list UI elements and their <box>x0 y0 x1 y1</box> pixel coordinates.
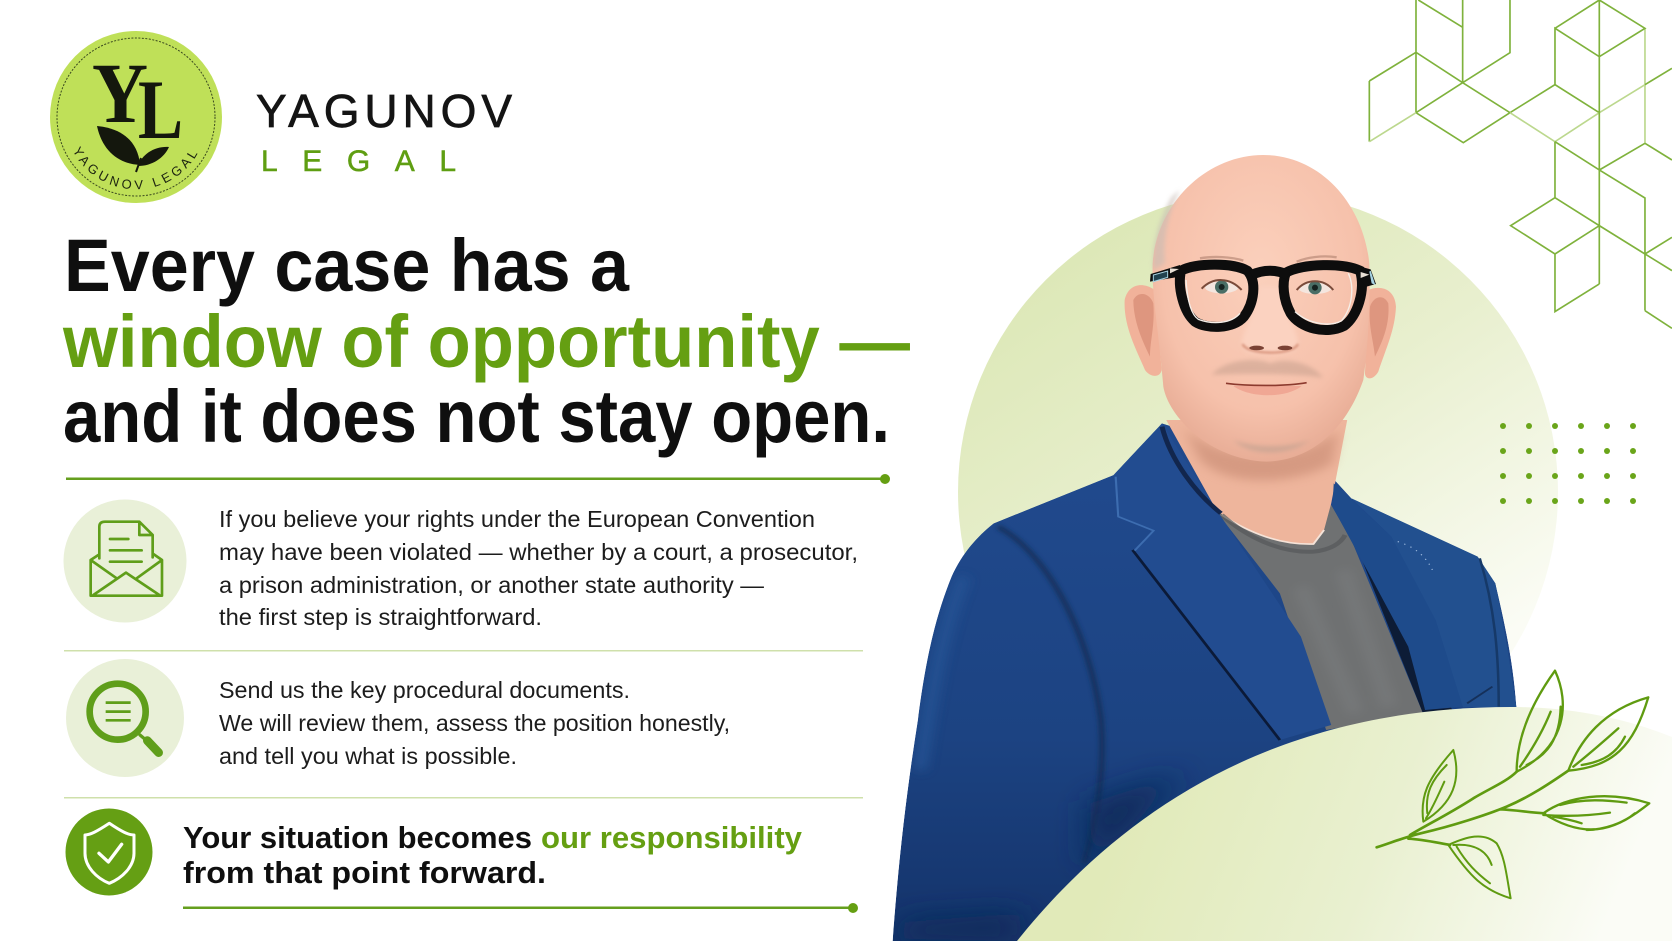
eyebrows <box>1200 256 1337 262</box>
breast stitching <box>1398 542 1434 573</box>
leaf 3 <box>1568 697 1648 771</box>
headline: Every case has a <box>64 224 630 307</box>
leaf 2 <box>1517 671 1563 772</box>
mouth <box>1233 386 1302 395</box>
leaf sprig <box>1377 671 1649 898</box>
dot grid <box>1500 423 1636 504</box>
logo badge: YAGUNOV LEGAL <box>74 146 198 190</box>
headline <box>62 224 910 458</box>
step 1 text: the first step is straightforward. <box>219 604 542 630</box>
leaf 4 <box>1543 796 1649 830</box>
logo badge <box>50 31 222 203</box>
headline: and it does not stay open. <box>63 375 890 458</box>
wordmark: LEGAL <box>261 145 456 178</box>
step 2 text: We will review them, assess the position honestly, <box>219 710 730 736</box>
stems <box>1377 771 1568 847</box>
nose <box>1242 287 1298 353</box>
shirt <box>1213 500 1423 730</box>
head <box>1153 155 1370 462</box>
left lapel <box>1114 423 1331 740</box>
step 2 text: Send us the key procedural documents. <box>219 677 630 703</box>
foreground mound <box>1017 707 1672 941</box>
leaf 1 <box>1423 750 1456 822</box>
eyes <box>1205 281 1238 293</box>
glasses <box>1150 265 1376 330</box>
headline rule with dot <box>66 474 890 484</box>
headline: window of opportunity — <box>62 300 910 383</box>
face <box>1125 155 1396 462</box>
closing statement: Your situation becomes <box>183 820 532 855</box>
step 1 text: If you believe your rights under the European Convention <box>219 506 815 532</box>
sleeve highlight <box>920 577 964 770</box>
wordmark: YAGUNOV <box>256 85 512 137</box>
closing statement: from that point forward. <box>183 855 546 890</box>
right ear <box>1365 288 1396 378</box>
closing statement: our responsibility <box>541 820 803 855</box>
isometric cube pattern <box>1369 0 1672 328</box>
logo leaves <box>97 126 169 172</box>
leaf 5 <box>1448 836 1511 898</box>
step 1 text: a prison administration, or another state authority — <box>219 572 764 598</box>
monogram L: L <box>138 63 183 157</box>
step 2 text: and tell you what is possible. <box>219 743 517 769</box>
shield icon <box>66 808 152 896</box>
background circle <box>958 192 1558 792</box>
step 2 text <box>219 677 730 769</box>
circular label <box>72 149 200 189</box>
step 1: icon envelope <box>64 500 186 622</box>
step 2: icon magnifier <box>66 659 184 777</box>
closing statement <box>183 820 803 890</box>
closing rule with dot <box>183 903 858 913</box>
monogram Y: Y <box>92 45 148 141</box>
sleeve seam <box>998 527 1102 863</box>
neck <box>1166 420 1347 544</box>
step 1 text: may have been violated — whether by a court, a prosecutor, <box>219 539 858 565</box>
wordmark <box>256 85 512 178</box>
stubble <box>1212 360 1323 378</box>
left ear <box>1125 285 1162 376</box>
step 1 text <box>219 506 858 630</box>
shirt shadow and right lapel <box>1332 500 1452 713</box>
collar band <box>1222 515 1345 552</box>
portrait: man in blue jacket <box>893 155 1520 941</box>
torso: jacket and shirt <box>893 420 1520 941</box>
